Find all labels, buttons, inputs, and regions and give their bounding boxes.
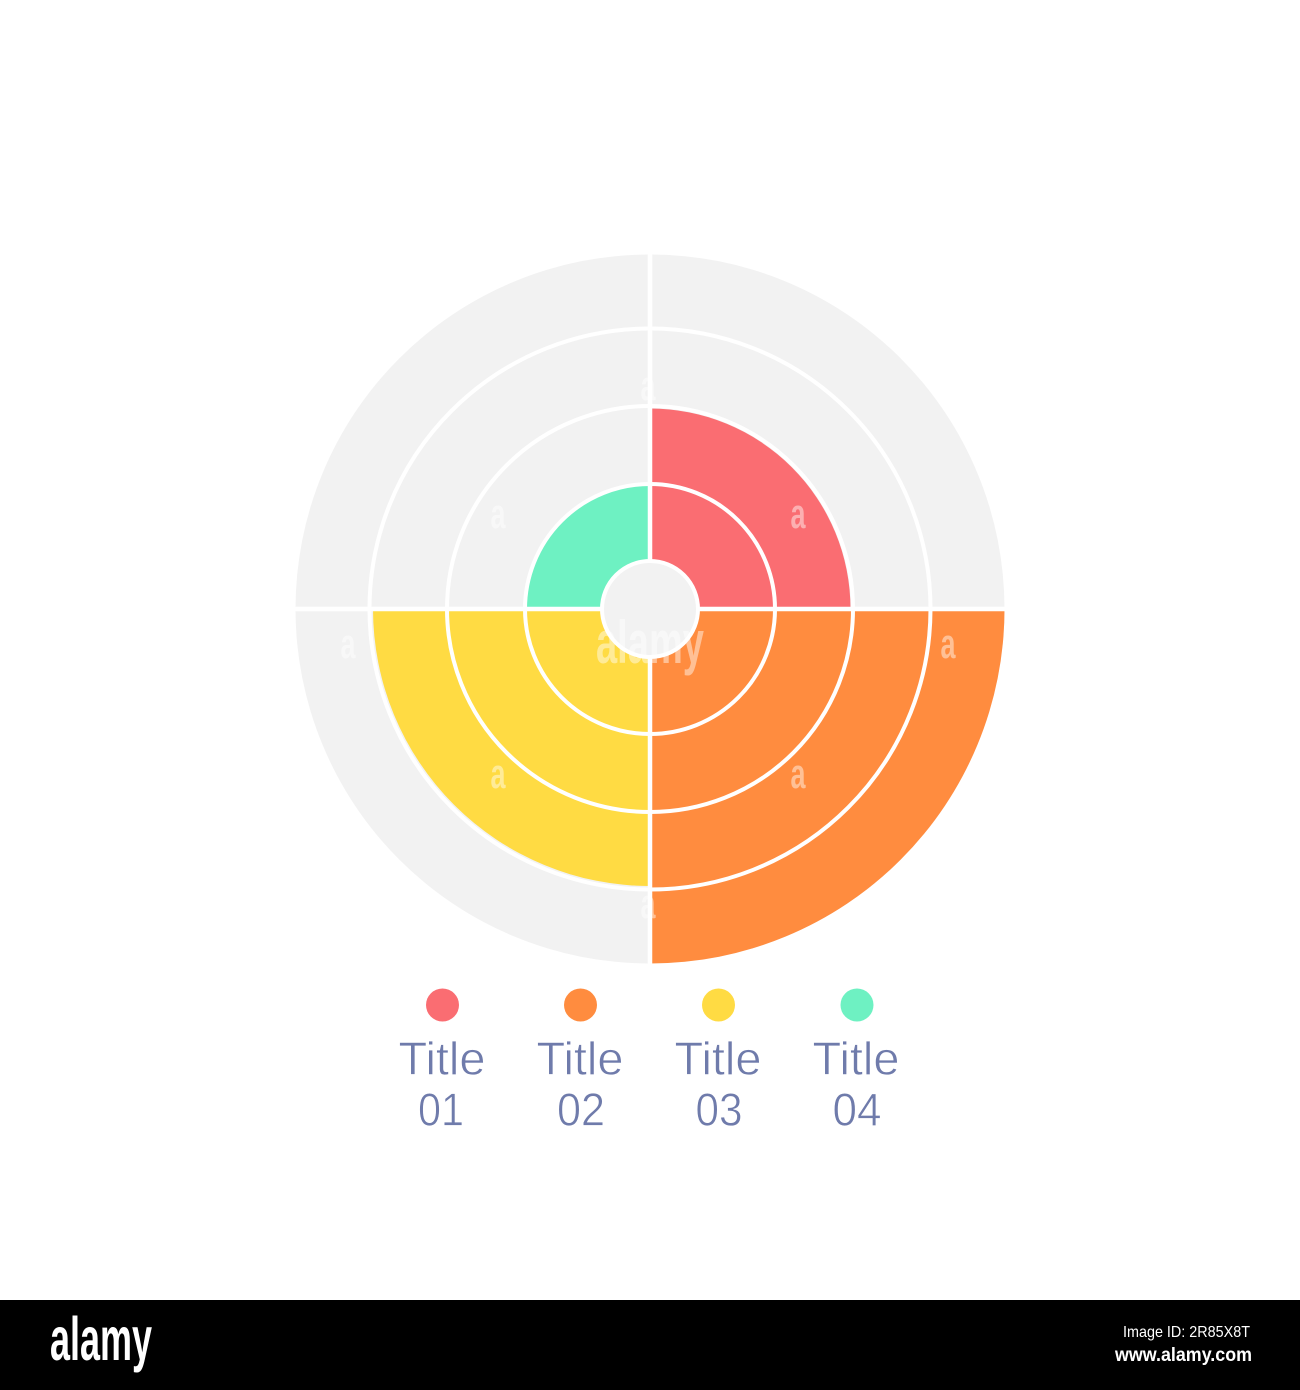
watermark: a — [490, 750, 506, 797]
series 01 red quadrant — [650, 408, 850, 609]
legend item: Title 02 — [536, 988, 624, 1136]
legend item: Title 03 — [674, 988, 762, 1136]
website: www.alamy.com — [1114, 1345, 1252, 1366]
watermark: a — [490, 490, 506, 537]
chart background disc — [296, 254, 1004, 964]
legend item: Title 03: Title — [674, 1032, 762, 1084]
quadrant dividers — [291, 250, 1009, 968]
watermark: a — [790, 750, 806, 797]
legend item: Title 02: 02 — [557, 1084, 605, 1136]
series 03 yellow quadrant — [373, 609, 650, 886]
footer bar — [0, 1300, 1300, 1390]
legend — [398, 988, 900, 1136]
legend item: Title 01: Title — [398, 1032, 486, 1084]
legend item: Title 01 — [398, 988, 486, 1136]
legend item: Title 01: 01 — [418, 1084, 464, 1136]
footer logo: alamy — [50, 1305, 152, 1373]
watermark: a — [640, 362, 656, 409]
series 02 orange quadrant — [650, 609, 1004, 964]
watermark: a — [640, 880, 656, 927]
radial chart — [291, 250, 1009, 968]
legend item: Title 02: Title — [536, 1032, 624, 1084]
watermark: a — [340, 620, 356, 667]
legend item: Title 04: 04 — [832, 1084, 882, 1136]
legend item: Title 04 — [812, 988, 900, 1136]
legend item: Title 03: 03 — [696, 1084, 742, 1136]
watermark: a — [790, 490, 806, 537]
legend item: Title 04: Title — [812, 1032, 900, 1084]
watermark: a — [940, 620, 956, 667]
watermark — [340, 362, 956, 927]
series 04 green quadrant — [526, 486, 650, 609]
image id: Image ID: 2R85X8T — [1123, 1324, 1250, 1341]
watermark: alamy — [596, 609, 704, 676]
center hub — [602, 561, 698, 657]
ring dividers — [370, 328, 930, 890]
